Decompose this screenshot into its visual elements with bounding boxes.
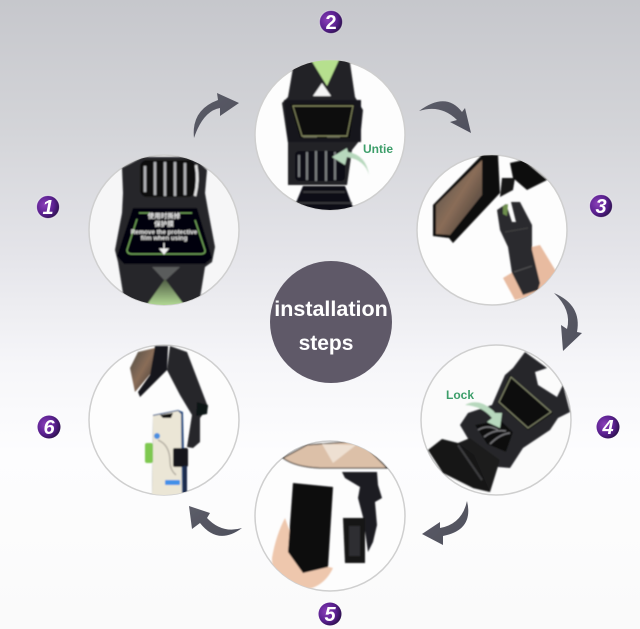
arrow: step 4 to 5 — [422, 501, 468, 545]
panel: step 4 lock — [421, 345, 571, 495]
arrow: step 5 to 6 — [189, 506, 242, 536]
badge: 2 — [320, 10, 342, 34]
label: Lock: Lock — [446, 388, 474, 402]
arrow: step 1 to 2 — [194, 93, 239, 138]
badge: 3: 3 — [595, 196, 607, 218]
badge: 1: 1 — [42, 197, 54, 219]
arrow: step 3 to 4 — [554, 293, 582, 351]
panel: step 6 finished mount — [89, 345, 239, 497]
label: Untie: Untie — [363, 142, 393, 156]
badge: 3 — [590, 194, 612, 218]
badge: 6: 6 — [43, 417, 55, 439]
text: film notice: 保护膜 — [154, 219, 174, 228]
panel: step 3 attach to mirror — [417, 155, 567, 305]
panel: step 1 remove film — [89, 155, 239, 310]
text: film notice: 使用时撕掉 — [148, 211, 181, 220]
badge: 4 — [596, 416, 620, 439]
text: film notice: Remove the protective — [131, 229, 198, 236]
badge: 2: 2 — [325, 12, 337, 34]
badge: 4: 4 — [601, 417, 614, 439]
panel: step 5 phone in hand — [255, 441, 405, 591]
badge: 5: 5 — [324, 604, 336, 626]
text: film notice — [131, 211, 198, 242]
badge: 5 — [318, 602, 342, 626]
center circle: installation steps — [270, 261, 392, 383]
center circle: installation steps: steps — [299, 332, 353, 355]
badge: 1 — [36, 196, 60, 219]
text: film notice: film when using — [141, 235, 188, 242]
arrow: step 2 to 3 — [419, 101, 471, 133]
badge: 6 — [38, 416, 60, 439]
center circle: installation steps: installation — [274, 297, 388, 321]
panel: step 2 untie — [255, 60, 405, 215]
